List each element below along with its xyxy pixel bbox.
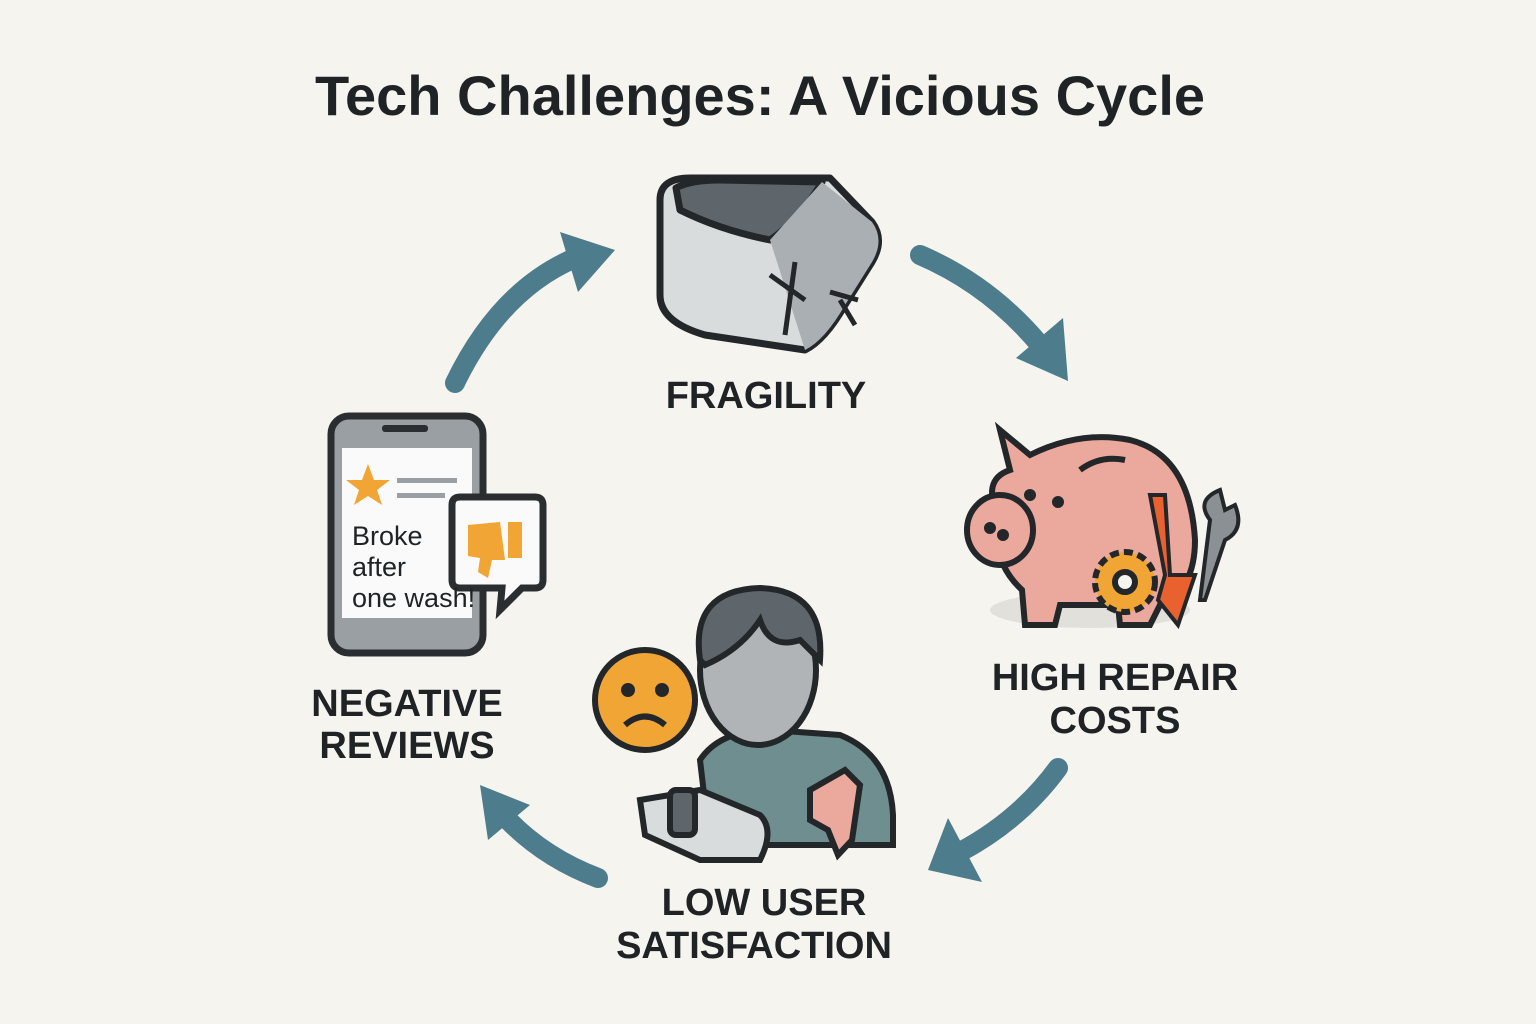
label: negative reviews: NEGATIVE [311,683,503,725]
icon: piggy bank with gear, wrench, down arrow [967,430,1238,628]
arrow: repair costs to low satisfaction [928,768,1058,882]
label: high repair costs: HIGH REPAIR [992,657,1238,699]
review text: one wash! [352,583,475,613]
icon: broken wearable band [660,178,878,350]
review text: after [352,552,406,582]
arrow: negative reviews to fragility [455,232,615,383]
arrow: fragility to repair costs [920,255,1068,381]
review text: Broke [352,521,423,551]
label: high repair costs: COSTS [1050,700,1180,742]
label: low user satisfaction: LOW USER [662,882,866,924]
icon: sad user with smartwatch [595,588,893,860]
label: fragility: FRAGILITY [666,375,866,417]
arrow: low satisfaction to negative reviews [480,785,598,878]
title: Tech Challenges: A Vicious Cycle [315,64,1205,127]
label: negative reviews: REVIEWS [319,725,495,767]
label: low user satisfaction: SATISFACTION [616,925,892,967]
icon: phone with review and thumbs down bubble [331,416,543,653]
